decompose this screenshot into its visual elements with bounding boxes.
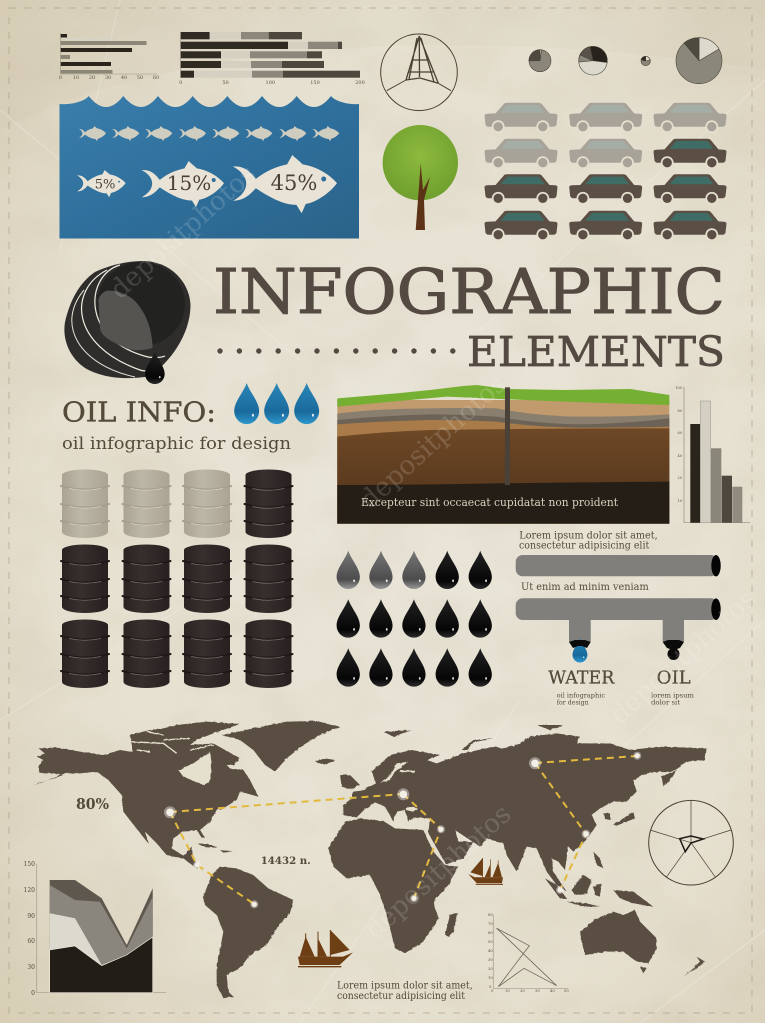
pie 1 <box>529 50 551 72</box>
text: pipe caption two: Ut enim ad minim veniam <box>521 581 649 593</box>
route nodes <box>164 752 641 908</box>
line chart axis labels: 10 <box>488 975 493 980</box>
watermark: depositphotos <box>360 799 517 945</box>
label: oil: lorem ipsum <box>651 691 694 699</box>
text: map caption <box>337 979 473 1002</box>
bar chart axis labels: 10 <box>73 75 79 81</box>
area chart axis labels: 150 <box>24 861 35 868</box>
bar chart axis labels: 40 <box>121 75 127 81</box>
grass <box>337 385 669 407</box>
line chart axis labels: 20 <box>488 966 493 971</box>
icon: sailing ship indian ocean <box>468 858 503 884</box>
bar chart axis labels: 30 <box>105 75 111 81</box>
icons: blue water drops <box>234 383 319 424</box>
label: oil <box>651 668 694 706</box>
area chart axis labels: 0 <box>31 990 35 997</box>
line chart axis labels: 20 <box>520 988 525 993</box>
bar chart axis labels: 50 <box>137 75 143 81</box>
stacked chart axis labels: 50 <box>222 80 229 86</box>
line chart axis labels: 50 <box>564 988 569 993</box>
horizontal bar chart <box>59 33 159 81</box>
icon: tipped oil barrel <box>64 261 190 384</box>
label: oil: dolor sit <box>651 698 680 706</box>
label: oil: OIL <box>657 668 691 689</box>
radar chart <box>649 800 733 885</box>
well pipe <box>505 387 510 485</box>
panel: soil cross section <box>337 385 669 524</box>
watermark: depositphotos <box>355 369 512 515</box>
bar chart axis labels: 0 <box>59 75 62 81</box>
area chart axis labels <box>24 861 35 997</box>
line chart axis labels: 50 <box>488 939 493 944</box>
vertical chart axis labels: 80 <box>678 409 682 413</box>
stacked bar chart <box>179 32 365 86</box>
line chart axis labels: 80 <box>488 912 493 917</box>
area chart axis labels: 60 <box>27 938 35 945</box>
water valve and drop <box>569 638 591 662</box>
stacked chart axis labels <box>179 80 365 86</box>
text: oil infographic for design: oil infographic for design <box>62 434 291 454</box>
area chart <box>24 861 166 997</box>
line chart axis labels <box>488 912 569 993</box>
vertical chart axis labels: 10 <box>678 499 682 503</box>
area chart axis labels: 90 <box>27 913 35 920</box>
label: water <box>548 668 615 706</box>
title: INFOGRAPHIC <box>213 255 725 328</box>
line chart axis labels: 60 <box>488 930 493 935</box>
barrel pictogram <box>61 470 292 688</box>
soil caption: Excepteur sint occaecat cupidatat non proident <box>361 496 619 509</box>
fish 15 percent: 15% <box>167 171 211 195</box>
bar chart axis labels: 60 <box>153 75 159 81</box>
icon: sailing ship atlantic <box>298 930 353 967</box>
oil valve and drop <box>663 640 684 660</box>
stacked chart axis labels: 100 <box>266 80 275 86</box>
line chart axis labels: 0 <box>491 988 494 993</box>
line chart axis labels: 10 <box>505 988 510 993</box>
car grid pictogram <box>484 103 726 241</box>
watermark: depositphotos <box>605 584 762 730</box>
vertical chart axis labels: 60 <box>678 431 682 435</box>
text: map caption: Lorem ipsum dolor sit amet, <box>337 979 473 991</box>
icon: oil derrick in circle <box>381 34 457 111</box>
watermark <box>105 159 762 945</box>
vertical chart axis labels: 100 <box>675 386 682 390</box>
watermark: depositphotos <box>105 159 262 305</box>
line chart axis labels: 30 <box>488 957 493 962</box>
text: map caption: consectetur adipisicing elit <box>337 990 466 1002</box>
fish 45 percent: 45% <box>271 171 317 195</box>
fish 45 percent <box>233 155 337 213</box>
text: pipe caption <box>519 529 658 552</box>
landmass: europe asia africa australia <box>328 725 707 977</box>
subtitle: ELEMENTS <box>467 328 725 376</box>
label: water: WATER <box>548 668 615 689</box>
stacked chart axis labels: 150 <box>310 80 320 86</box>
area chart axis labels: 30 <box>27 964 35 971</box>
line chart axis labels: 40 <box>488 948 493 953</box>
stacked chart axis labels: 200 <box>355 80 365 86</box>
line chart <box>488 912 569 993</box>
line chart axis labels: 30 <box>535 988 540 993</box>
line chart axis labels: 0 <box>489 984 492 989</box>
oil drop pictogram <box>337 551 492 687</box>
row of small fish <box>79 126 339 141</box>
area chart axis labels: 120 <box>24 887 35 894</box>
fish 5 percent: 5% <box>95 178 115 192</box>
text: pipe caption: consectetur adipisicing elit <box>519 540 650 552</box>
icon: tree <box>383 125 458 230</box>
dotted separator <box>217 348 455 354</box>
oil drop falling from barrel <box>145 352 165 384</box>
pie 3 <box>641 56 650 66</box>
fish 15 percent <box>142 161 224 207</box>
panel: sea with fish <box>60 96 359 238</box>
landmass: americas and greenland <box>33 721 340 998</box>
fish 5 percent <box>77 170 126 197</box>
icon: upper pipe <box>516 555 721 576</box>
stacked chart axis labels: 0 <box>179 80 182 86</box>
pie 4 <box>676 38 722 84</box>
text: pipe caption: Lorem ipsum dolor sit amet, <box>519 529 658 541</box>
line chart axis labels: 40 <box>550 988 555 993</box>
heading: oil info: OIL INFO: <box>62 398 216 429</box>
vertical chart axis labels: 40 <box>678 454 682 458</box>
icon: branching pipe <box>516 598 721 662</box>
route lines <box>170 756 637 904</box>
label: water: oil infographic <box>557 691 605 699</box>
label: water: for design <box>557 698 589 706</box>
text: distance: 14432 n. <box>261 855 311 867</box>
world map <box>33 721 707 998</box>
bar chart axis labels <box>59 75 159 81</box>
vertical bar chart <box>675 386 750 523</box>
vertical chart axis labels <box>675 386 682 503</box>
text: 80 percent: 80% <box>76 796 109 813</box>
vertical chart axis labels: 20 <box>678 476 682 480</box>
pie charts <box>529 38 722 84</box>
pie 2 <box>579 46 607 75</box>
bar chart axis labels: 20 <box>89 75 95 81</box>
line chart axis labels: 70 <box>488 921 493 926</box>
